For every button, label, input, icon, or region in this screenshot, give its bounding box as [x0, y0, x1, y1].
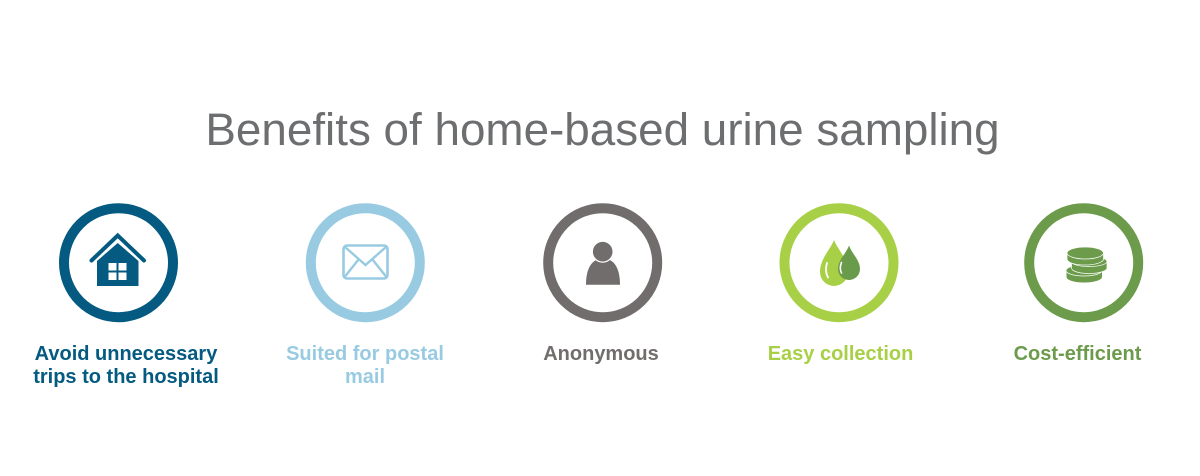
icon: coins in green ring	[1029, 208, 1138, 317]
title: Benefits of home-based urine sampling	[205, 104, 1000, 155]
icon: envelope in light blue ring	[311, 208, 420, 317]
label: cost-efficient: Cost-efficient	[1014, 343, 1141, 365]
label: avoid trips: Avoid unnecessary	[35, 343, 217, 365]
label: avoid trips	[33, 343, 219, 388]
icon: house in dark blue ring	[64, 208, 173, 317]
label: postal mail	[286, 343, 444, 388]
label: anonymous: Anonymous	[543, 343, 659, 365]
label: postal mail: Suited for postal	[286, 343, 444, 365]
label: postal mail: mail	[345, 366, 385, 388]
label: easy collection: Easy collection	[768, 343, 913, 365]
icon: person in grey ring	[548, 208, 657, 317]
label: avoid trips: trips to the hospital	[33, 366, 219, 388]
icon: drops in lime ring	[784, 208, 894, 317]
